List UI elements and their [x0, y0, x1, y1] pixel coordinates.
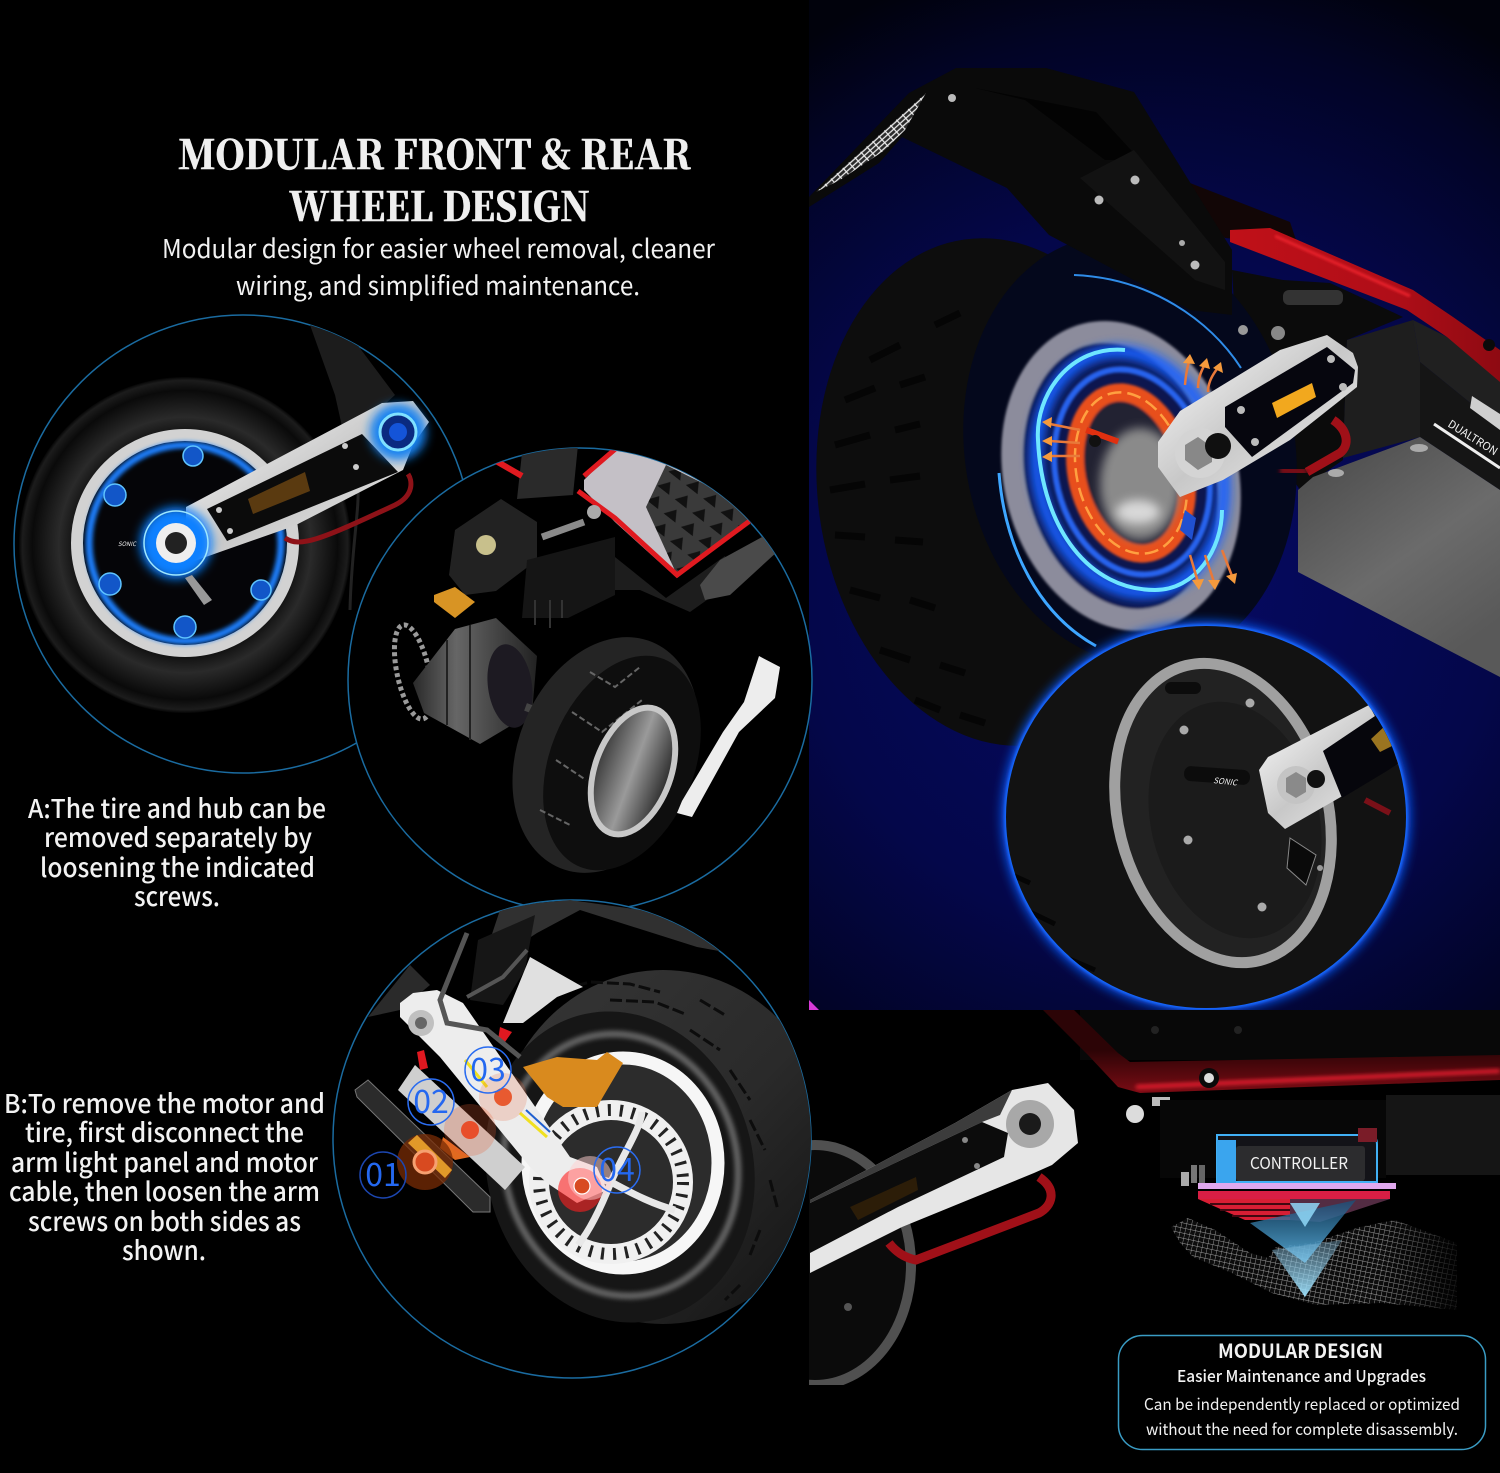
number markers: [360, 1045, 640, 1198]
title: [178, 124, 691, 233]
callout: modular design: Can be independently replaced or optimized: [1144, 1391, 1460, 1415]
brake caliper: [523, 1052, 623, 1107]
text block B: [4, 1084, 325, 1268]
spinning rim with neon rings: [1000, 319, 1242, 632]
magenta corner mark: [809, 1000, 819, 1010]
rear tire: [486, 970, 811, 1324]
text block A: screws.: [134, 877, 220, 914]
axle glow: [118, 507, 212, 605]
hub motor: [387, 618, 544, 744]
callout: modular design: MODULAR DESIGN: [1218, 1335, 1383, 1364]
detail inset: wheel hub: SONIC: [1213, 775, 1239, 789]
number markers: 04: [599, 1145, 635, 1191]
text block A: A:The tire and hub can be: [28, 789, 326, 826]
panel: circle A wheel with screws: [14, 315, 472, 773]
subtitle: [162, 229, 716, 303]
controller box: [1198, 1128, 1396, 1222]
heat arrows: [1042, 354, 1237, 590]
text block B: shown.: [122, 1231, 206, 1268]
number markers: 03: [470, 1045, 506, 1091]
text block B: B:To remove the motor and: [4, 1084, 325, 1121]
wireframe hand: [1171, 1215, 1460, 1313]
text block B: cable, then loosen the arm: [9, 1172, 320, 1209]
panel: circle C motor removal: [333, 900, 830, 1378]
light panel: [355, 1080, 490, 1212]
big rear tire: [816, 238, 1296, 746]
white arm exploded: [677, 656, 780, 817]
callout: modular design: without the need for complete disassembly.: [1146, 1416, 1458, 1440]
red handle tube: [285, 474, 411, 542]
battery deck and red frame: DUALTRON: [1445, 416, 1500, 459]
red frame: [1043, 1010, 1500, 1186]
subtitle: wiring, and simplified maintenance.: [236, 266, 640, 303]
text block B: tire, first disconnect the: [25, 1113, 304, 1150]
white swing arm: [400, 933, 607, 1203]
panel: circle B exploded view: [348, 444, 812, 912]
fender: [809, 68, 1232, 315]
swing arm with reflector: [1158, 325, 1358, 497]
title: WHEEL DESIGN: [289, 176, 590, 233]
text block B: arm light panel and motor: [11, 1143, 318, 1180]
callout: modular design: [1118, 1335, 1486, 1450]
deck and frame: [434, 444, 790, 628]
screw hot spots: [397, 1073, 612, 1212]
screw markers: [99, 446, 271, 638]
callout: modular design: Easier Maintenance and Upgrades: [1177, 1363, 1426, 1387]
panel: controller module: [809, 1010, 1500, 1450]
blue projection arrows: [1250, 1200, 1356, 1297]
arm plate: [398, 1065, 525, 1190]
text block A: loosening the indicated: [40, 848, 315, 885]
panel: large rear wheel on blue background: [784, 0, 1500, 1013]
text block A: removed separately by: [44, 818, 312, 855]
text block B: screws on both sides as: [28, 1202, 301, 1239]
dim wheel and arm: [809, 1083, 1078, 1385]
number markers: 02: [413, 1077, 449, 1123]
text block A: [28, 789, 326, 914]
subtitle: Modular design for easier wheel removal, cleaner: [162, 229, 716, 266]
title: MODULAR FRONT & REAR: [178, 124, 691, 181]
number markers: 01: [365, 1150, 401, 1196]
axle glow: SONIC: [118, 539, 137, 548]
tire exploded: [512, 637, 701, 873]
battery deck and red frame: [1190, 183, 1500, 677]
controller label: CONTROLLER: [1250, 1150, 1348, 1174]
swing arm: [186, 401, 429, 564]
detail inset: wheel hub: [1001, 621, 1411, 1013]
